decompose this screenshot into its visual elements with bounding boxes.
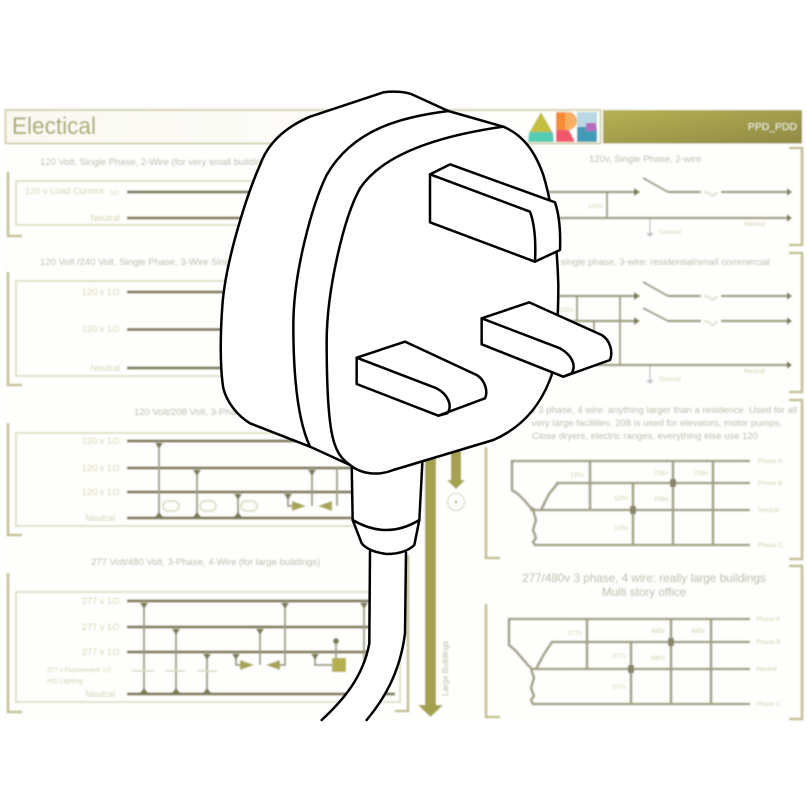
arrow: large buildings scale	[418, 455, 450, 717]
panel: 120 volt single phase 2 wire: Neutral	[90, 213, 120, 223]
panel: 277/480v 3 phase 4 wire schematic: 480v	[691, 628, 706, 635]
header: title bar	[6, 110, 600, 144]
panel: 120/208v 3 phase 4 wire schematic: 208v	[654, 496, 669, 503]
plug body	[221, 92, 558, 474]
panel: 120/208 volt 3 phase 4 wire	[8, 407, 401, 535]
panel: 277/480v 3 phase 4 wire schematic: 480v	[651, 655, 666, 662]
panel: 120/208 volt 3 phase 4 wire: 120 Volt/208 Volt, 3-Phase, 4-Wire	[134, 407, 279, 418]
panel: 120/208 volt 3 phase 4 wire: 120 v 1∅	[82, 463, 120, 473]
panel: 120/208v 3 phase 4 wire schematic: 120v	[614, 525, 629, 532]
heading: Electical: Electical	[12, 113, 96, 140]
panel: 277/480v 3 phase 4 wire schematic: 277v	[568, 630, 583, 637]
panel: 277/480v 3 phase 4 wire schematic: 480v	[651, 628, 666, 635]
panel: 277/480v 3 phase 4 wire schematic: 277/480v 3 phase, 4 wire: really large buildings	[522, 572, 766, 585]
earth pin	[430, 164, 560, 262]
panel: 120/208v 3 phase 4 wire schematic: 120v	[570, 472, 585, 479]
panel: 120/208v 3 phase 4 wire schematic: 120/208v 3 phase, 4 wire: anything larger than a residence. Used for all	[496, 405, 797, 416]
panel: 120/240v single phase 3 wire schematic: 120v	[560, 307, 575, 314]
panel: 120/208 volt 3 phase 4 wire: Neutral	[85, 513, 115, 523]
panel: 120/208v 3 phase 4 wire schematic	[486, 400, 802, 559]
panel: 277/480v 3 phase 4 wire schematic: Multi story office	[602, 586, 686, 599]
label: large buildings: Large Buildings	[441, 641, 450, 696]
panel: 120/240 volt single phase 3 wire: Neutral	[90, 363, 120, 373]
panel: 120/208v 3 phase 4 wire schematic: Phase C	[758, 542, 783, 549]
panel: 120/208v 3 phase 4 wire schematic: Phase B	[758, 480, 783, 487]
panel: 120/240 volt single phase 3 wire: 120 v 1∅	[82, 324, 120, 334]
logo: ARE	[528, 112, 597, 142]
panel: 120v single phase 2 wire schematic: 120v, Single Phase, 2-wire	[589, 154, 701, 165]
icon: UK three-pin plug	[221, 92, 611, 474]
plug body band lines	[293, 111, 503, 465]
panel: 277/480v 3 phase 4 wire schematic: 277v	[612, 653, 627, 660]
panel: 277/480v 3 phase 4 wire schematic: Phase C	[756, 701, 781, 708]
panel: 277/480v 3 phase 4 wire schematic: Neutral	[756, 666, 778, 673]
panel: 120/208v 3 phase 4 wire schematic: Phase A	[758, 458, 783, 465]
panel: 120v single phase 2 wire schematic	[540, 148, 802, 245]
panel: 277/480v 3 phase 4 wire schematic: Phase B	[756, 639, 781, 646]
panel: 120/208v 3 phase 4 wire schematic: very large facilities. 208 is used for elevators, motor pumps,	[532, 418, 782, 429]
panel: 120/240v single phase 3 wire schematic: 120/240v, single phase, 3-wire: residential/small commercial	[517, 257, 770, 268]
right pin	[482, 302, 611, 377]
left pin	[357, 342, 486, 416]
slide background	[4, 108, 803, 720]
arrow: medium buildings scale	[447, 450, 465, 510]
panel: 277/480 volt 3 phase 4 wire: 277 v 1∅	[82, 647, 120, 657]
panel: 277/480 volt 3 phase 4 wire	[8, 555, 408, 712]
panel: 120/240v single phase 3 wire schematic: Ground	[659, 376, 681, 383]
panel: 277/480 volt 3 phase 4 wire: 277 v 1∅	[82, 622, 120, 632]
panel: 120 volt single phase 2 wire: 1∅	[110, 190, 120, 197]
panel: 120/240v single phase 3 wire schematic: Neutral	[744, 368, 766, 375]
panel: 120/208 volt 3 phase 4 wire: 120 v 1∅	[82, 487, 120, 497]
panel: 120v single phase 2 wire schematic: Ground	[659, 229, 681, 236]
panel: 277/480 volt 3 phase 4 wire: 277 v 1∅	[82, 596, 120, 606]
panel: 120/208 volt 3 phase 4 wire: 120 v 1∅	[82, 436, 120, 446]
panel: 277/480 volt 3 phase 4 wire: 277 v Fluorescent/ 1∅	[47, 667, 112, 674]
panel: 120/208v 3 phase 4 wire schematic: Close dryers, electric ranges, everything else use 120	[532, 431, 758, 442]
panel: 277/480 volt 3 phase 4 wire: 277 Volt/480 Volt, 3-Phase, 4-Wire (for large buildings)	[91, 557, 320, 568]
panel: 120/208v 3 phase 4 wire schematic: 208v	[654, 470, 669, 477]
header: PPD_PDD bar	[603, 110, 802, 144]
panel: 277/480v 3 phase 4 wire schematic	[486, 566, 802, 719]
slide: electrical distribution diagrams	[4, 108, 803, 720]
panel: 277/480v 3 phase 4 wire schematic: 277v	[612, 684, 627, 691]
panel: 120/208v 3 phase 4 wire schematic: 120v	[614, 495, 629, 502]
icon: plug cord and strain relief	[322, 457, 423, 720]
panel: 120/208v 3 phase 4 wire schematic: Neutral	[758, 507, 780, 514]
header: PPD_PDD bar: PPD_PDD	[748, 122, 797, 133]
panel: 277/480v 3 phase 4 wire schematic: Phase A	[756, 616, 781, 623]
panel: 120/208v 3 phase 4 wire schematic: 208v	[694, 470, 709, 477]
panel: 120/240v single phase 3 wire schematic	[517, 253, 802, 392]
panel: 120v single phase 2 wire schematic: Neutral	[744, 221, 766, 228]
panel: 120v single phase 2 wire schematic: 120v	[588, 203, 603, 210]
panel: 120 volt single phase 2 wire	[8, 157, 401, 236]
panel: 120/240 volt single phase 3 wire: 120 Volt /240 Volt, Single Phase, 3-Wire Single	[40, 257, 238, 268]
panel: 277/480 volt 3 phase 4 wire: HID Lighting	[47, 678, 83, 685]
panel: 120 volt single phase 2 wire: 120 v Load Current	[25, 186, 104, 196]
panel: 120/240 volt single phase 3 wire: 120 v 1∅	[82, 287, 120, 297]
panel: 277/480 volt 3 phase 4 wire: Neutral	[85, 689, 115, 699]
panel: 120 volt single phase 2 wire: 120 Volt, Single Phase, 2-Wire (for very small buildings)	[40, 157, 274, 168]
panel: 120/240 volt single phase 3 wire	[8, 257, 401, 385]
